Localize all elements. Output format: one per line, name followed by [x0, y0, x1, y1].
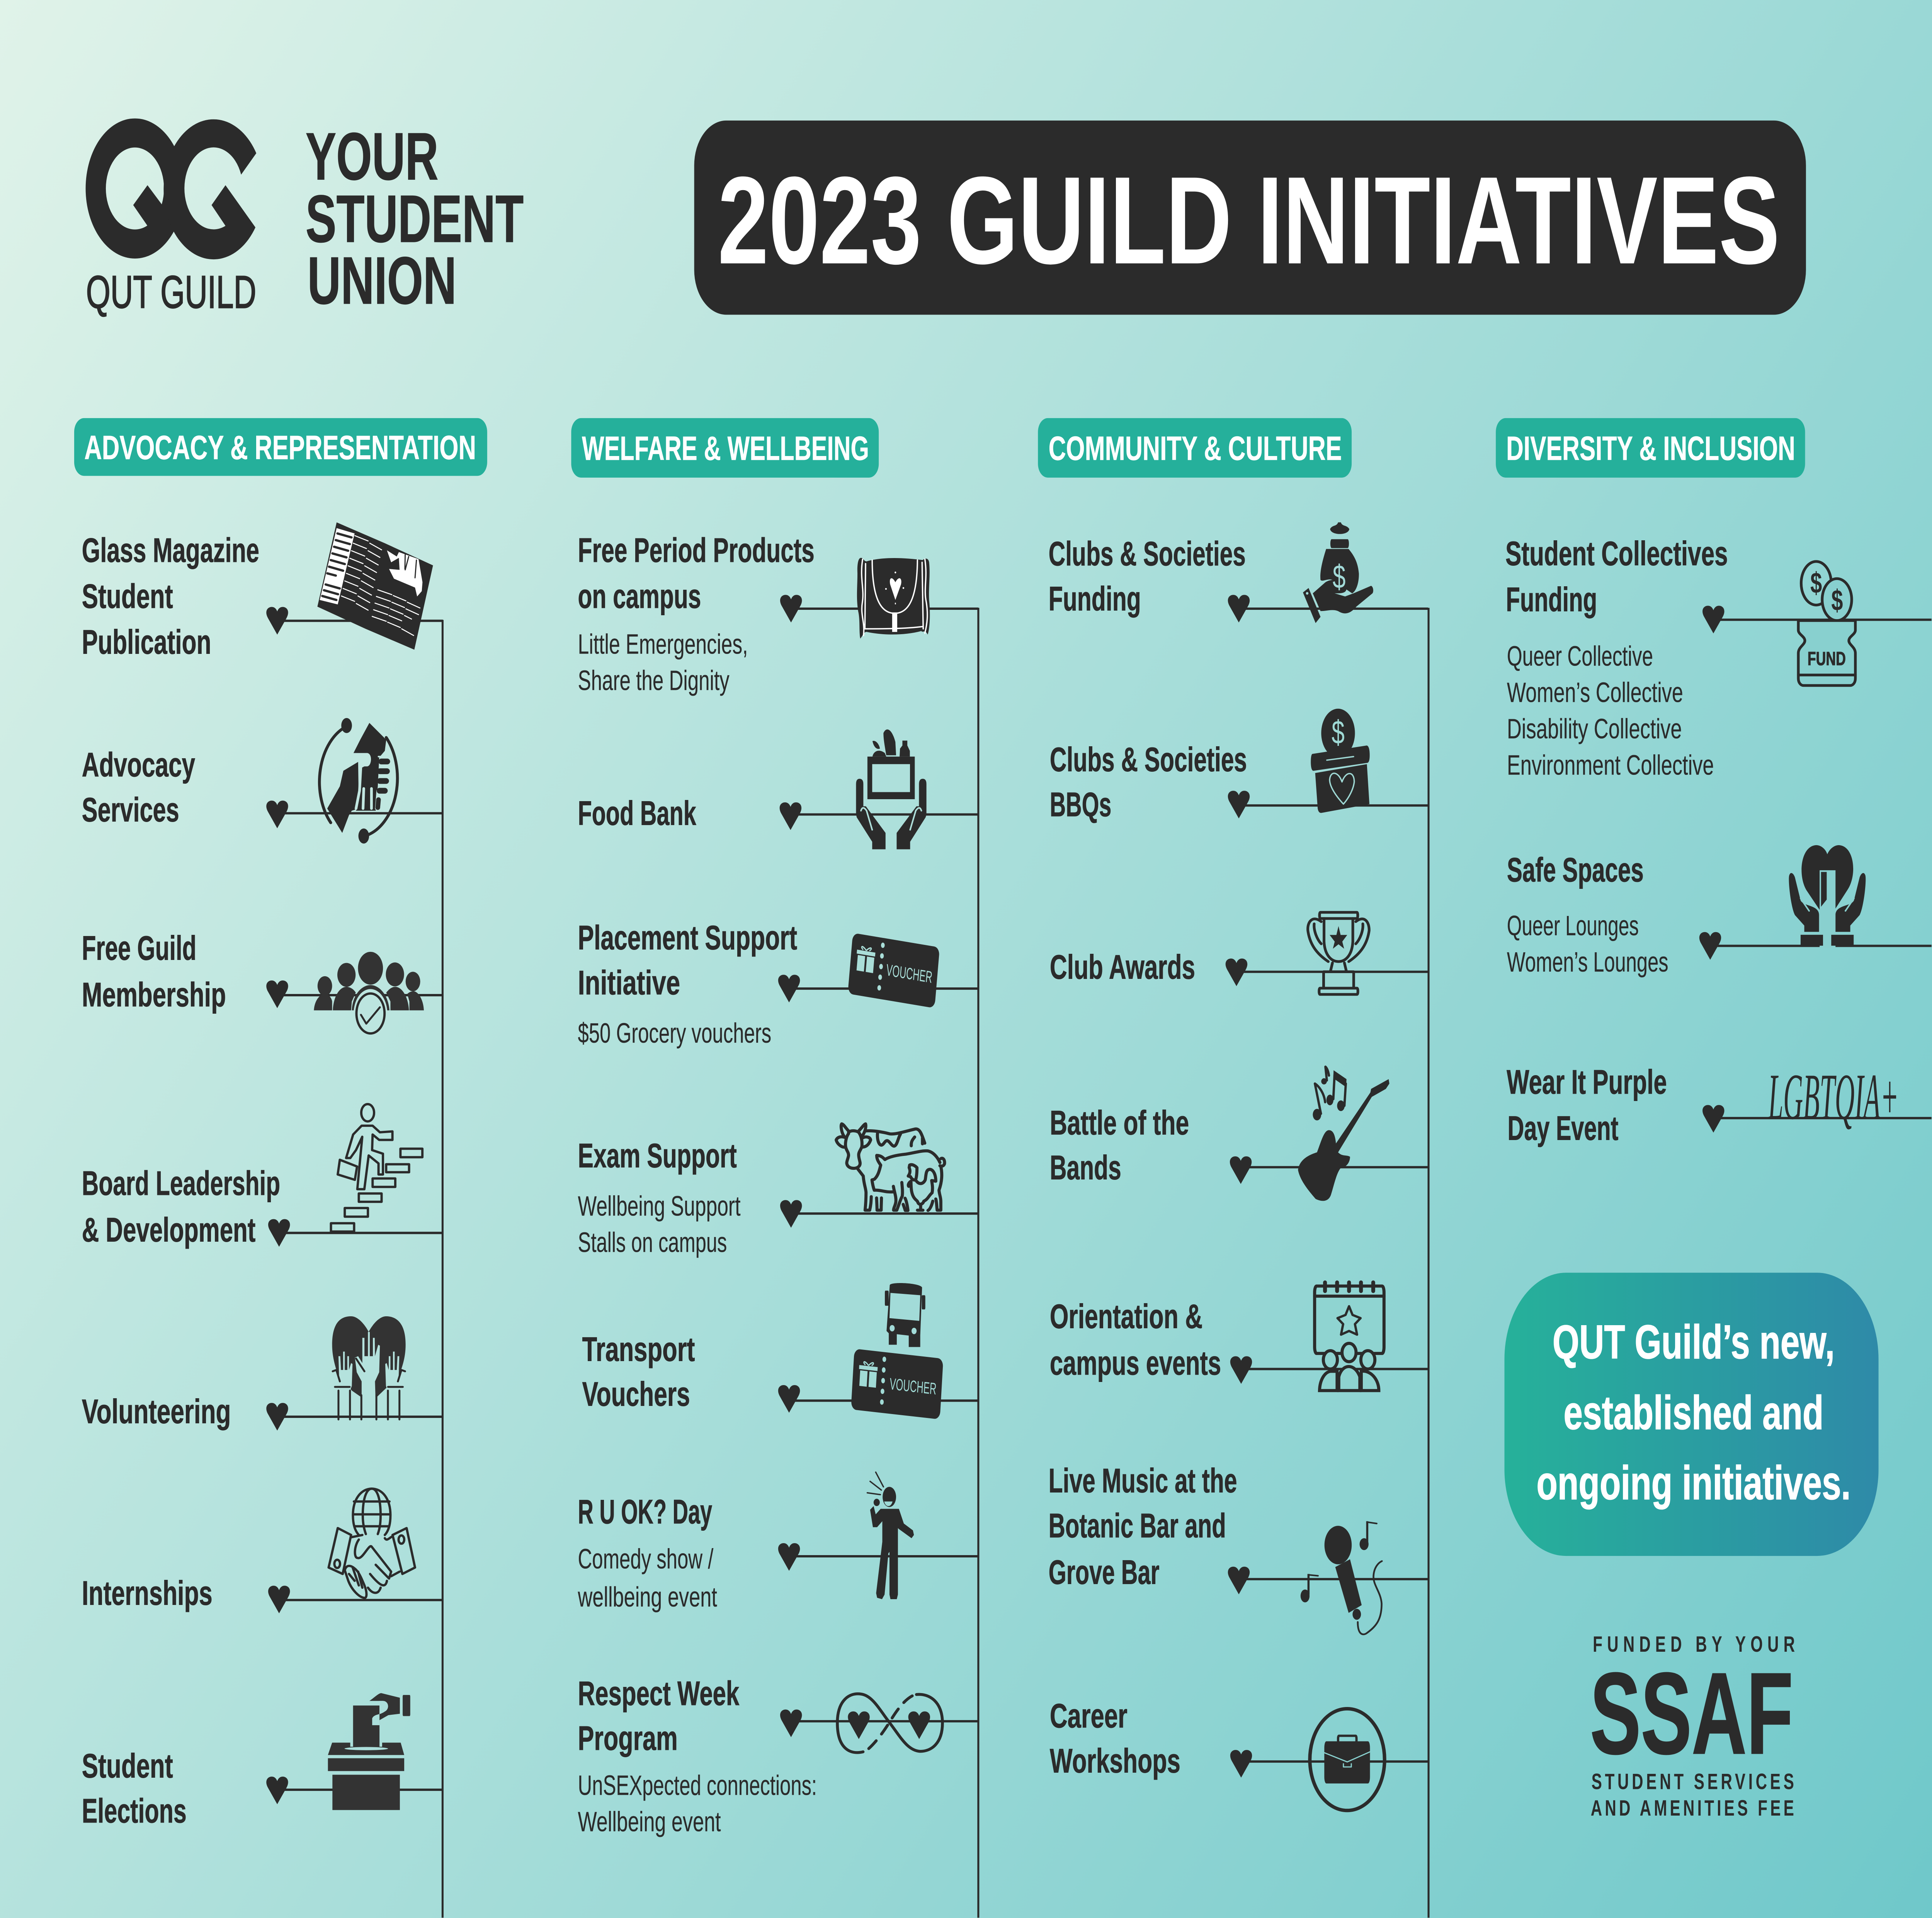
connector with heart: [266, 1777, 443, 1804]
logo: QUT Guild: [86, 118, 256, 318]
connector with heart: [268, 1586, 443, 1613]
item text: UnSEXpected connections:: [578, 1770, 817, 1801]
connector with heart: [780, 802, 978, 830]
callout: new, established and ongoing initiatives: [1504, 1273, 1879, 1556]
connector with heart: [1230, 1750, 1428, 1778]
item: Transport Vouchers: [582, 1283, 978, 1419]
item text: [582, 1330, 695, 1413]
icon: handshake in circle: [320, 718, 398, 844]
item: R U OK? Day: [578, 1472, 978, 1613]
item text: wellbeing event: [578, 1581, 717, 1613]
connector with heart: [266, 980, 443, 1008]
heading: advocacy and representation: ADVOCACY & REPRESENTATION: [84, 429, 476, 467]
connector with heart: [780, 595, 978, 623]
item text: Glass Magazine: [82, 531, 259, 570]
student services and amenities fee: [1591, 1769, 1794, 1821]
connector with heart: [268, 1219, 443, 1247]
item text: Career: [1050, 1697, 1128, 1735]
item text: [578, 1493, 717, 1613]
item text: Student: [82, 1747, 173, 1785]
connector with heart: [778, 975, 978, 1002]
logo mark: QG: [86, 118, 256, 259]
item: Respect Week Program: [578, 1674, 978, 1838]
icon: cow, pig and chicken: [836, 1124, 945, 1210]
item text: [1505, 534, 1728, 781]
item text: [578, 1137, 741, 1258]
logo wordmark: QUT GUILD: [86, 266, 256, 318]
item text: Initiative: [578, 963, 680, 1002]
item text: [1049, 535, 1246, 618]
icon: transport voucher: [851, 1349, 943, 1419]
heading: advocacy and representation: [74, 418, 487, 476]
item text: Women’s Lounges: [1507, 947, 1668, 978]
item text: [1049, 1462, 1237, 1591]
item text: Volunteering: [82, 1392, 231, 1431]
item text: on campus: [578, 577, 701, 615]
item text: [82, 1164, 280, 1249]
icon: open magazine: [317, 522, 433, 650]
icon: infinity with hearts: [837, 1694, 942, 1753]
item text: Program: [578, 1719, 678, 1758]
spine: column 1: [442, 620, 443, 1918]
item text: Clubs & Societies: [1050, 740, 1247, 779]
heading: diversity and inclusion: [1496, 418, 1805, 478]
item: Volunteering: [82, 1316, 443, 1431]
icon: globe and handshake: [328, 1489, 415, 1598]
icon: bus: [885, 1283, 925, 1347]
icon: hands and hearts: [332, 1316, 406, 1419]
item text: Exam Support: [578, 1137, 737, 1175]
icon: comedian with microphone: [867, 1472, 914, 1599]
item text: Workshops: [1050, 1742, 1180, 1780]
item text: [82, 746, 195, 829]
item text: Respect Week: [578, 1674, 739, 1712]
icon: guitar and music notes: [1298, 1067, 1389, 1201]
item text: Services: [82, 791, 179, 829]
heading: community and culture: COMMUNITY & CULTURE: [1049, 430, 1342, 468]
spine: column 3: [1428, 608, 1429, 1918]
item text: $50 Grocery vouchers: [578, 1018, 771, 1049]
icon: donation box: $: [1332, 714, 1345, 751]
item text: Free Guild: [82, 929, 196, 967]
SSAF wordmark: SSAF: [1590, 1649, 1793, 1778]
item: Free Guild Membership: [82, 929, 443, 1038]
callout: new, established and ongoing initiatives: QUT Guild’s new,: [1553, 1315, 1835, 1369]
item text: [1507, 1063, 1667, 1147]
item text: Funding: [1049, 580, 1141, 618]
item: Career Workshops: [1050, 1697, 1428, 1811]
item text: [578, 919, 797, 1049]
item: Board Leadership and Development: [82, 1104, 443, 1249]
item text: [82, 1747, 187, 1830]
icon: hand holding money bag: $: [1333, 558, 1345, 595]
icon: period product pouch: [857, 558, 930, 638]
connector with heart: [1702, 1105, 1932, 1133]
callout: new, established and ongoing initiatives: established and: [1564, 1386, 1823, 1440]
heading: welfare and wellbeing: [571, 418, 879, 478]
item text: & Development: [82, 1211, 255, 1249]
item text: Funding: [1506, 580, 1597, 619]
icon: fund jar with coins: $: [1831, 584, 1843, 617]
student services and amenities fee: AND AMENITIES FEE: [1591, 1795, 1794, 1821]
item text: Advocacy: [82, 746, 195, 784]
icon: donation box: [1311, 709, 1370, 813]
item text: [82, 929, 226, 1014]
item: Wear It Purple Day Event: [1507, 1060, 1932, 1147]
title banner: [694, 121, 1806, 315]
icon: microphone and notes: [1301, 1521, 1382, 1634]
connector with heart: [266, 1403, 443, 1431]
item text: Free Period Products: [578, 531, 815, 570]
icon: transport voucher: VOUCHER: [889, 1375, 937, 1398]
item text: Transport: [582, 1330, 695, 1368]
callout: new, established and ongoing initiatives: ongoing initiatives.: [1536, 1456, 1851, 1510]
item text: BBQs: [1050, 785, 1111, 824]
item: Clubs and Societies Funding: [1049, 522, 1428, 623]
item text: Elections: [82, 1792, 187, 1830]
item text: Live Music at the: [1049, 1462, 1237, 1500]
item text: [1050, 1297, 1221, 1382]
connector with heart: [780, 1709, 978, 1737]
item text: Safe Spaces: [1507, 851, 1644, 889]
tagline: your student union: UNION: [308, 243, 456, 318]
icon: group of people with check: [314, 952, 424, 1038]
tagline: your student union: STUDENT: [306, 181, 524, 256]
item text: Women’s Collective: [1507, 677, 1683, 708]
item text: Vouchers: [582, 1375, 690, 1413]
item text: [1050, 740, 1247, 824]
item text: Wellbeing event: [578, 1806, 721, 1838]
connector with heart: [266, 607, 443, 635]
item text: Queer Lounges: [1507, 910, 1639, 941]
item text: [1507, 851, 1668, 978]
spine: column 2: [978, 608, 979, 1918]
connector with heart: [1228, 1567, 1428, 1594]
item text: Stalls on campus: [578, 1227, 727, 1258]
item: Placement Support Initiative: [578, 919, 978, 1049]
item text: Battle of the: [1050, 1104, 1189, 1142]
heading: welfare and wellbeing: WELFARE & WELLBEING: [582, 430, 869, 468]
item text: Clubs & Societies: [1049, 535, 1246, 573]
student services and amenities fee: STUDENT SERVICES: [1592, 1769, 1794, 1794]
item text: campus events: [1050, 1344, 1221, 1382]
item text: Queer Collective: [1507, 641, 1653, 672]
item text: Student: [82, 577, 173, 615]
item: Student Elections: [82, 1693, 443, 1830]
icon: fund jar with coins: FUND: [1808, 648, 1846, 669]
item text: Food Bank: [578, 794, 696, 832]
connector with heart: [1226, 958, 1428, 986]
item text: Comedy show /: [578, 1544, 714, 1574]
item: Student Collectives Funding: [1505, 534, 1932, 781]
item: Exam Support: [578, 1124, 978, 1258]
icon: ballot box: [328, 1693, 410, 1810]
connector with heart: [1230, 1156, 1428, 1184]
connector with heart: [1699, 932, 1932, 960]
icon: hand holding money bag: [1303, 522, 1373, 623]
item text: Placement Support: [578, 919, 797, 957]
icon: grocery voucher: [848, 933, 940, 1008]
item: Clubs and Societies BBQs: [1050, 709, 1428, 824]
item text: Botanic Bar and: [1049, 1506, 1226, 1545]
connector with heart: [1228, 791, 1428, 819]
tagline: your student union: YOUR: [306, 119, 439, 194]
item text: Club Awards: [1050, 948, 1195, 986]
item: Club Awards: [1050, 912, 1428, 994]
connector with heart: [780, 1200, 978, 1228]
item text: Board Leadership: [82, 1164, 280, 1202]
item text: Bands: [1050, 1149, 1121, 1187]
item text: R U OK? Day: [578, 1493, 712, 1531]
item text: Share the Dignity: [578, 665, 730, 696]
icon: briefcase in circle: [1310, 1709, 1384, 1811]
item text: Publication: [82, 623, 211, 661]
item text: [578, 531, 815, 696]
icon: hands holding food box: [856, 730, 927, 849]
title banner: 2023 GUILD INITIATIVES: [718, 151, 1780, 290]
item text: Internships: [82, 1574, 213, 1612]
item: Live Music at the Botanic Bar and Grove Bar: [1049, 1462, 1428, 1634]
connector with heart: [1228, 595, 1428, 623]
item text: Little Emergencies,: [578, 629, 748, 660]
item: Glass Magazine: [82, 522, 443, 661]
item: Advocacy Services: [82, 718, 443, 844]
item: Food Bank: [578, 730, 978, 849]
connector with heart: [1702, 606, 1932, 633]
item text: Wear It Purple: [1507, 1063, 1667, 1101]
funded by your: FUNDED BY YOUR: [1593, 1632, 1795, 1657]
item text: Student Collectives: [1505, 534, 1728, 573]
item text: [1050, 1104, 1189, 1187]
item text: Environment Collective: [1507, 750, 1714, 781]
item: Free Period Products: [578, 531, 978, 696]
item: Safe Spaces: [1507, 845, 1932, 978]
icon: climbing stairs: [331, 1104, 422, 1232]
icon: hands holding heart door: [1789, 845, 1866, 948]
item: Internships: [82, 1489, 443, 1613]
heading: diversity and inclusion: DIVERSITY & INCLUSION: [1506, 430, 1795, 468]
item text: Membership: [82, 976, 226, 1014]
item text: [578, 1674, 817, 1838]
connector with heart: [778, 1543, 978, 1571]
item text: Wellbeing Support: [578, 1191, 741, 1222]
item: Orientation and campus events: [1050, 1282, 1428, 1390]
icon: calendar and audience: [1315, 1282, 1384, 1390]
item text: Orientation &: [1050, 1297, 1202, 1336]
connector with heart: [266, 801, 443, 828]
icon: trophy: [1308, 912, 1369, 994]
tagline: your student union: [306, 119, 524, 318]
icon: fund jar with coins: $: [1810, 567, 1822, 599]
item text: [1050, 1697, 1180, 1780]
item text: Grove Bar: [1049, 1553, 1160, 1591]
connector with heart: [778, 1385, 978, 1413]
icon: grocery voucher: VOUCHER: [886, 961, 933, 987]
icon: fund jar with coins: [1798, 562, 1855, 686]
SSAF funding logo: [1590, 1632, 1795, 1821]
item text: [82, 531, 259, 661]
connector with heart: [1230, 1356, 1428, 1384]
heading: community and culture: [1038, 418, 1352, 478]
item text: Day Event: [1507, 1109, 1618, 1147]
item text: Disability Collective: [1507, 713, 1682, 745]
item: Battle of the Bands: [1050, 1067, 1428, 1201]
